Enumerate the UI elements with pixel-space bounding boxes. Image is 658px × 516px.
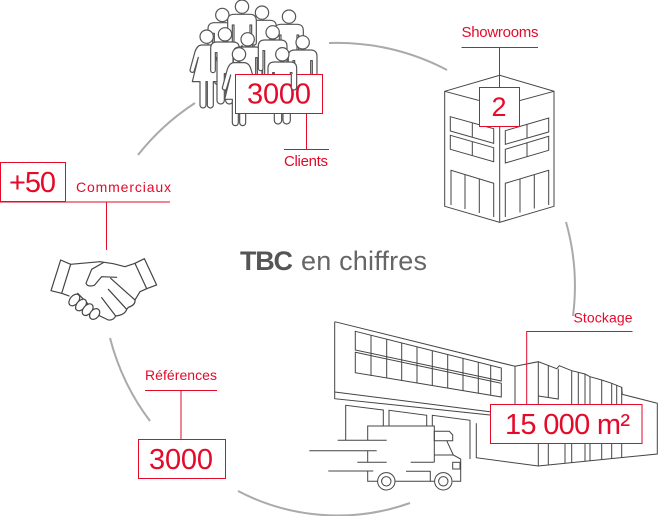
icon: showroom building: [445, 75, 554, 222]
icon: group of people: [190, 0, 317, 126]
callout: 3000 clients: Clients: [284, 153, 328, 170]
callout: 2 showrooms: [462, 24, 538, 126]
title: en chiffres: [301, 246, 427, 276]
callout: 2 showrooms: Showrooms: [462, 24, 538, 41]
panel: stockage: [309, 310, 657, 490]
panel: clients: [190, 0, 329, 170]
callout: 15 000 m²: Stockage: [574, 310, 633, 326]
callout: +50 commerciaux: Commerciaux: [76, 179, 171, 195]
panel: références: [138, 367, 226, 478]
icon: warehouse: [335, 322, 657, 466]
panel: commerciaux: [0, 162, 171, 321]
panel: showrooms: [445, 24, 554, 222]
callout: +50 commerciaux: +50: [9, 167, 56, 199]
icon: handshake: [51, 259, 157, 321]
callout: +50 commerciaux: [0, 162, 171, 250]
callout: 15 000 m²: 15 000 m²: [505, 409, 630, 441]
callout: 15 000 m²: [490, 310, 642, 444]
callout: 3000 clients: [236, 74, 329, 170]
callout: 2 showrooms: 2: [492, 92, 507, 122]
icon: delivery truck: [309, 426, 461, 490]
title: TBC: [240, 246, 293, 276]
cycle arcs: [110, 43, 575, 516]
callout: 3000 clients: 3000: [247, 78, 311, 110]
panel: références: 3000: [149, 444, 213, 476]
panel: références: Références: [145, 367, 217, 383]
